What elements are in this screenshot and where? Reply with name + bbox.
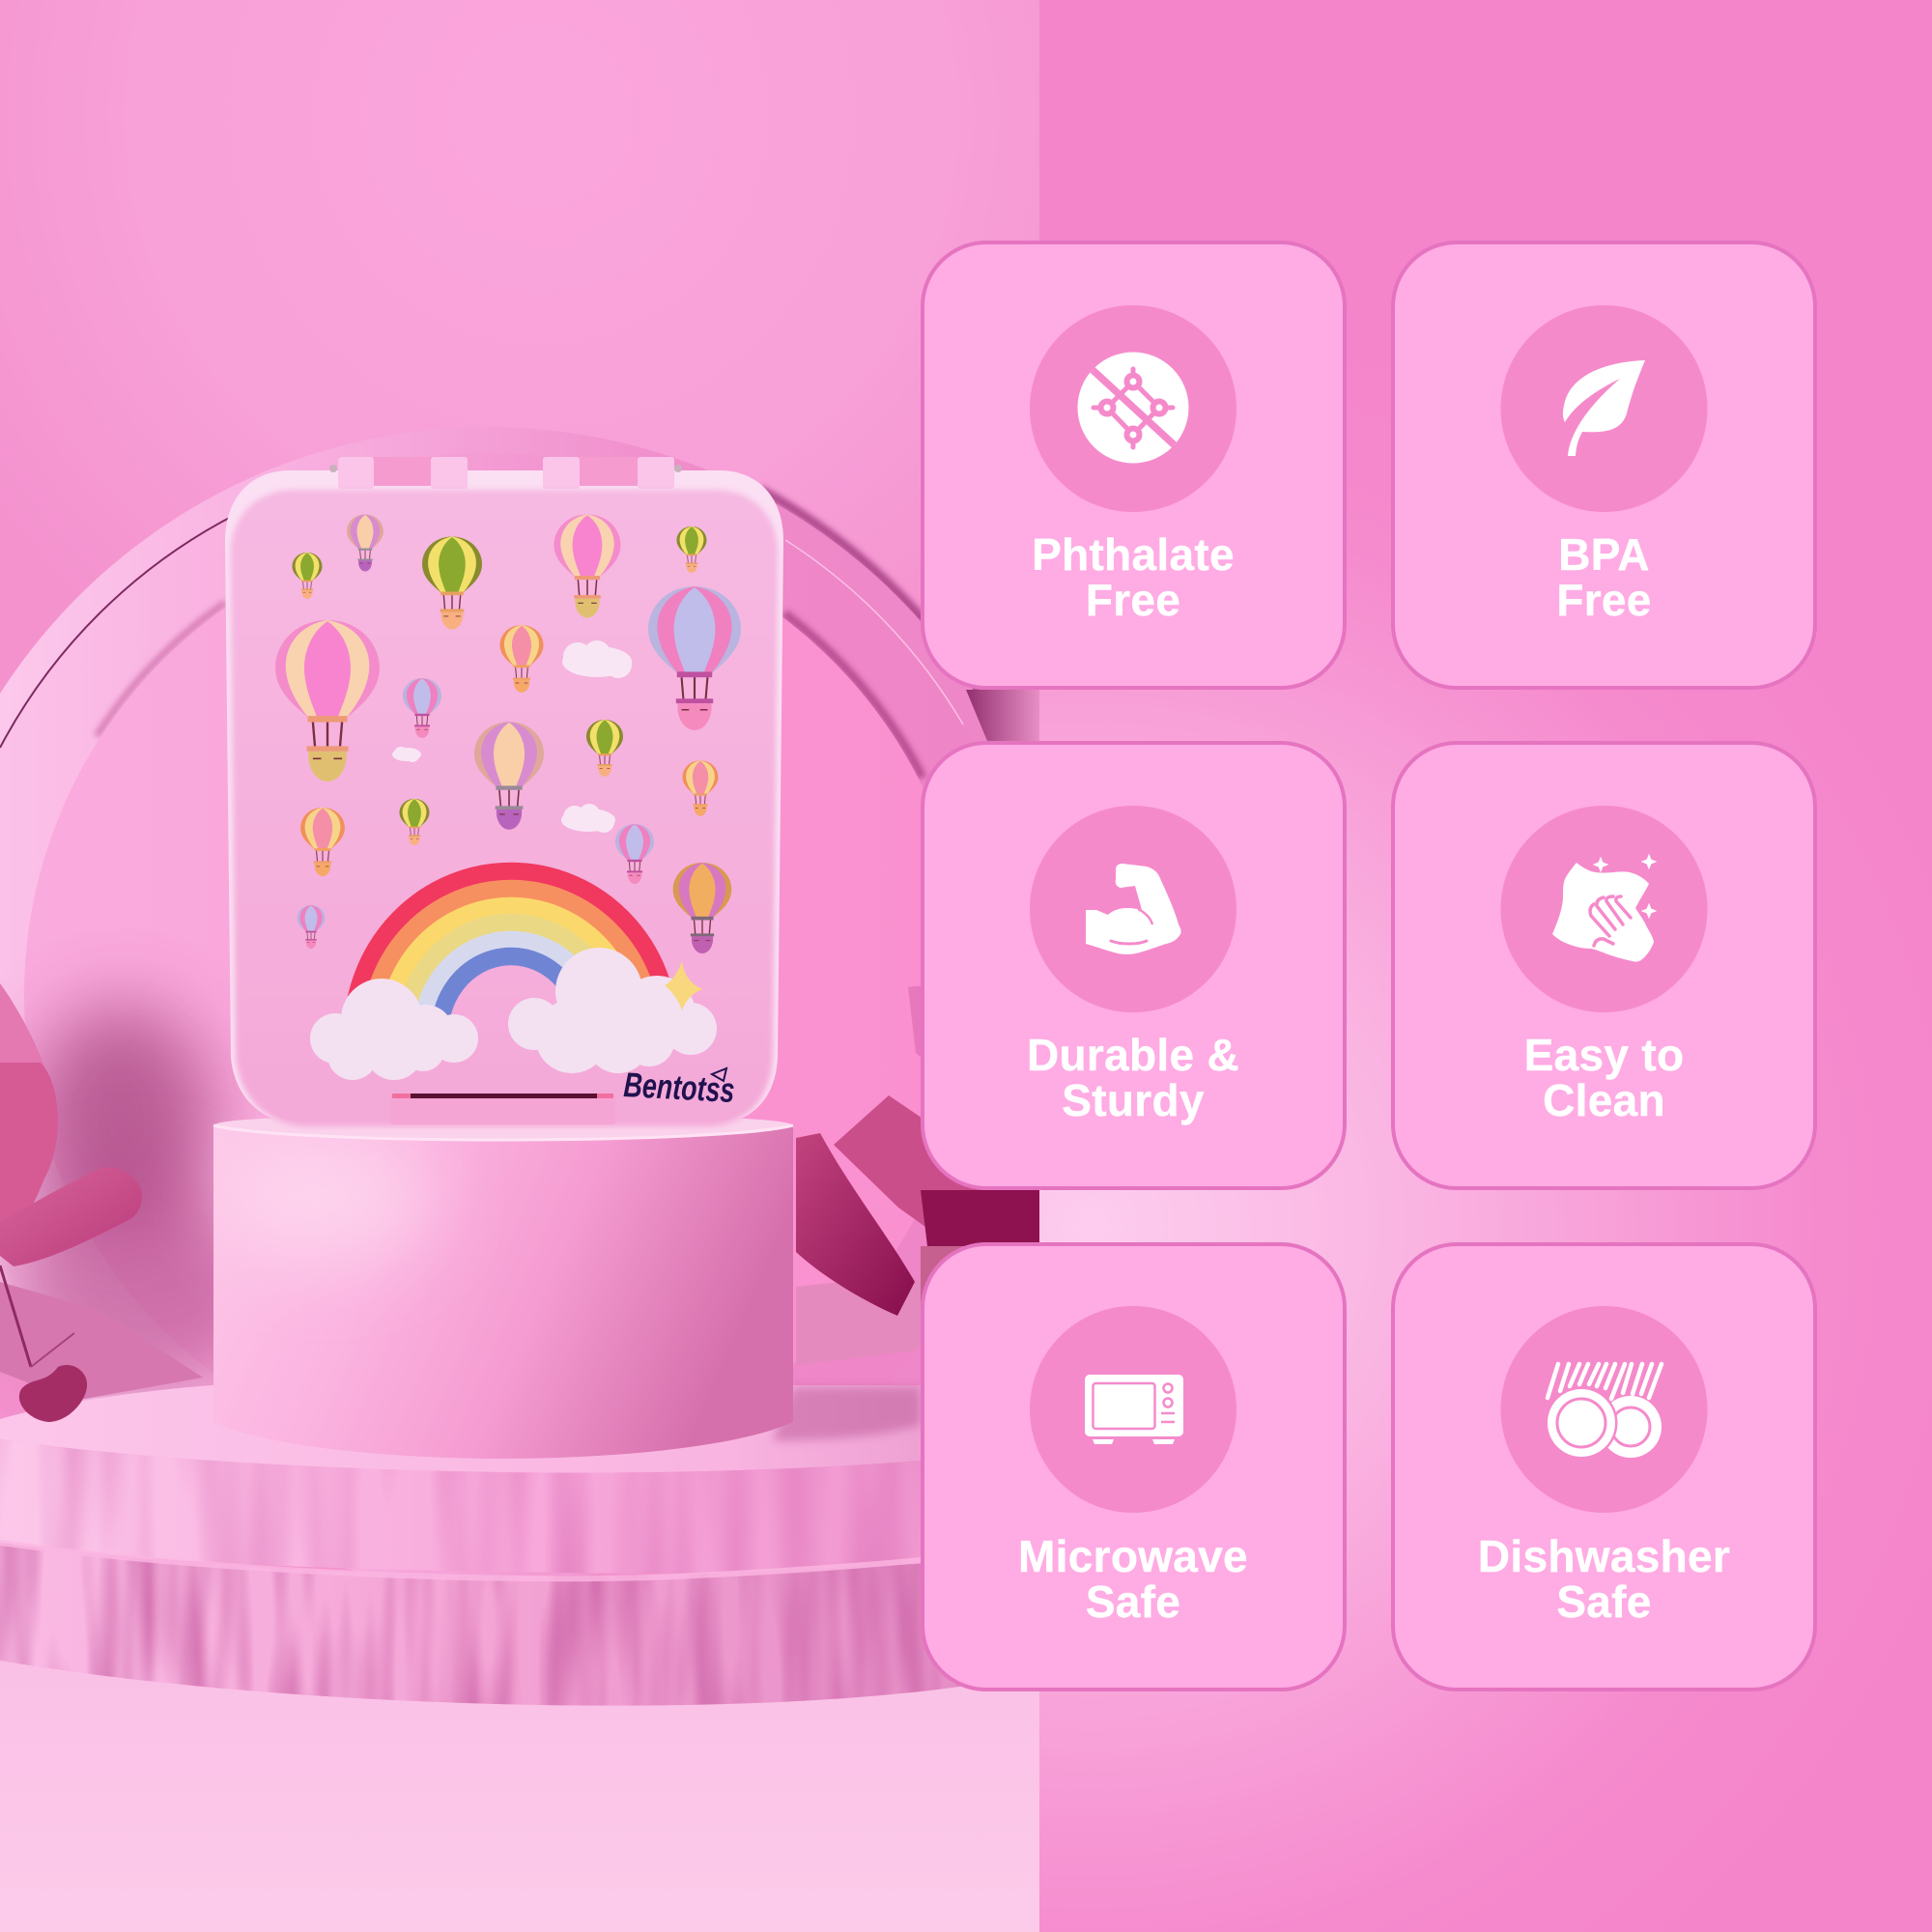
label: Dishwasher	[1478, 1531, 1730, 1581]
right background panel	[1039, 0, 1932, 1932]
card: Microwave Safe	[923, 1244, 1345, 1690]
label: Easy to	[1524, 1030, 1684, 1080]
small clouds	[392, 640, 632, 833]
platform lower pleated wall	[0, 1543, 1039, 1706]
label: Safe	[1556, 1577, 1652, 1627]
rainbow clouds	[310, 948, 717, 1080]
card: Dishwasher Safe	[1393, 1244, 1815, 1690]
rainbow	[353, 871, 669, 1034]
label: Free	[1086, 575, 1180, 625]
label: Phthalate	[1032, 529, 1235, 580]
box shell	[225, 470, 783, 1124]
latch slot	[390, 1094, 615, 1124]
card: Phthalate Free	[923, 242, 1345, 688]
icon: leaf	[1563, 360, 1645, 456]
label: Microwave	[1018, 1531, 1248, 1581]
stepped platform	[0, 1385, 961, 1706]
platform top surface	[0, 1385, 921, 1472]
hinges	[329, 457, 682, 489]
card: Easy to Clean	[1393, 743, 1815, 1188]
paper leaves: left cluster	[0, 983, 203, 1401]
icon: microwave	[1085, 1375, 1183, 1444]
icon: cleaning cloth and hand	[1552, 855, 1656, 962]
label: Durable &	[1027, 1030, 1239, 1080]
label: Safe	[1086, 1577, 1180, 1627]
icon: flexed arm	[1086, 864, 1181, 954]
heart bud	[19, 1365, 87, 1422]
card: BPA Free	[1393, 242, 1815, 688]
floor	[0, 1633, 1039, 1932]
icon: no phthalate molecule	[1078, 352, 1188, 464]
icon: plates and water spray	[1546, 1364, 1662, 1459]
decorative arch	[0, 427, 1067, 1586]
box lid face	[231, 490, 778, 1126]
label: Free	[1556, 575, 1652, 625]
left scene background wall	[0, 0, 1039, 1932]
cylinder pedestal	[213, 1113, 921, 1459]
brand logo: Bentotss	[623, 1065, 736, 1110]
label: BPA	[1558, 529, 1650, 580]
lunch box	[225, 457, 783, 1126]
gold star	[665, 961, 703, 1010]
label: Sturdy	[1062, 1075, 1205, 1125]
card: Durable & Sturdy	[923, 743, 1345, 1188]
paper leaves: right cluster	[796, 986, 1039, 1381]
platform upper pleated wall	[0, 1439, 848, 1574]
label: Clean	[1543, 1075, 1665, 1125]
hot air balloons	[275, 515, 741, 953]
